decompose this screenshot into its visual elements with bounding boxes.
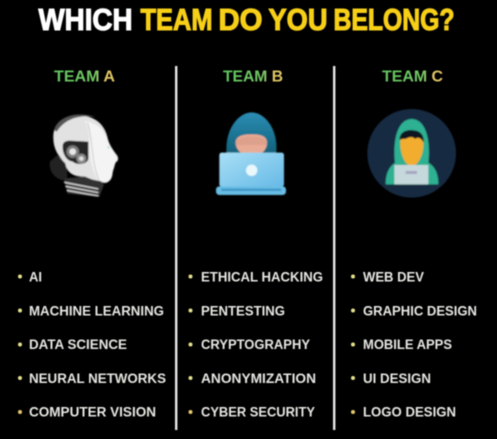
list: team A: DATA SCIENCE (29, 337, 127, 352)
icon: hooded developer (367, 109, 456, 198)
title: BELONG? (334, 2, 454, 37)
title: TEAM (140, 2, 212, 37)
list: team A (18, 270, 166, 420)
list: team A: NEURAL NETWORKS (29, 371, 166, 386)
heading: team B: TEAM B (223, 68, 283, 86)
list: team B: ETHICAL HACKING (201, 270, 323, 284)
icon: robot head (50, 114, 118, 197)
list: team C: UI DESIGN (363, 371, 431, 386)
list: team A: MACHINE LEARNING (29, 304, 164, 318)
heading: team A: TEAM A (54, 68, 115, 86)
heading: team C: TEAM C (382, 68, 443, 86)
divider right (333, 66, 335, 430)
list: team C (351, 270, 477, 420)
divider left (175, 66, 177, 430)
title: WHICH (38, 2, 132, 37)
list: team B: CRYPTOGRAPHY (201, 337, 310, 352)
list: team B: PENTESTING (201, 304, 285, 318)
list: team A: AI (29, 270, 42, 284)
list: team C: WEB DEV (363, 270, 424, 284)
list: team B: CYBER SECURITY (201, 404, 315, 420)
title: DO (218, 2, 262, 37)
title (38, 2, 454, 37)
list: team A: COMPUTER VISION (29, 404, 156, 420)
list: team C: LOGO DESIGN (363, 404, 456, 420)
list: team C: MOBILE APPS (363, 337, 452, 352)
list: team B (188, 270, 323, 420)
list: team C: GRAPHIC DESIGN (363, 304, 477, 318)
icon: hacker with laptop (216, 112, 286, 195)
title: YOU (268, 2, 328, 37)
list: team B: ANONYMIZATION (201, 371, 316, 386)
